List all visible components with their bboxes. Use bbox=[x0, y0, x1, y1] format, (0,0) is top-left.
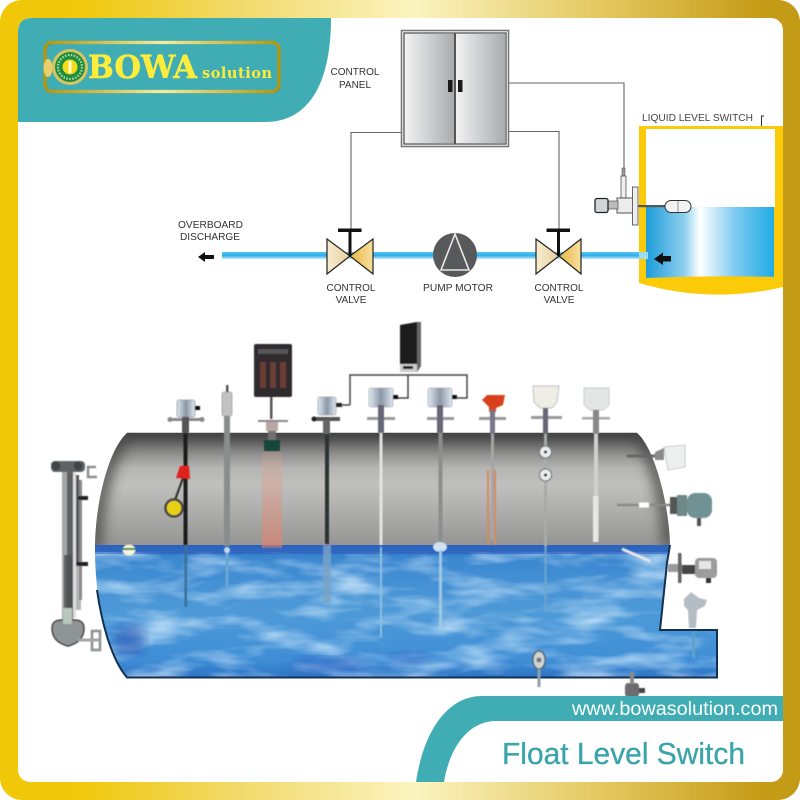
label: left control valve: CONTROL bbox=[327, 283, 376, 294]
logo tagline: solution bbox=[202, 65, 272, 82]
instrument: step-mounted transmitter bbox=[684, 592, 707, 658]
icon: control panel cabinet bbox=[402, 30, 508, 146]
label: control panel: CONTROL bbox=[331, 67, 380, 78]
instrument: float with red clamp bbox=[166, 400, 204, 607]
instrument: small probe bbox=[222, 385, 232, 588]
instrument: probe with head 5 bbox=[367, 388, 398, 637]
instrument: probe with head 6 bbox=[427, 388, 457, 630]
label: overboard discharge bbox=[178, 220, 243, 243]
label: right control valve: CONTROL bbox=[535, 283, 584, 294]
instrument: right upper side switch bbox=[627, 445, 685, 470]
logo wordmark: BOWA bbox=[88, 48, 198, 86]
label: control panel: PANEL bbox=[339, 80, 371, 91]
instrument: bottom drain valve bbox=[625, 672, 645, 697]
panel: small liquid tank bbox=[639, 126, 783, 295]
website url: www.bowasolution.com bbox=[571, 698, 778, 720]
instrument: white head with thick rod bbox=[582, 388, 610, 542]
panel: teal logo corner bbox=[18, 18, 331, 122]
logo emblem bbox=[44, 49, 88, 85]
title: Float Level Switch bbox=[502, 736, 745, 771]
instrument: magnetic side gauge bbox=[51, 461, 100, 650]
pipe: discharge line bbox=[222, 252, 648, 259]
panel: teal website band bbox=[416, 696, 783, 782]
icon: left control valve bbox=[327, 228, 373, 274]
logo: BOWA solution bbox=[44, 42, 280, 92]
label: liquid level switch: LIQUID LEVEL SWITCH bbox=[642, 113, 753, 124]
label: right control valve: VALVE bbox=[544, 295, 575, 306]
label: overboard discharge: DISCHARGE bbox=[180, 232, 240, 243]
instrument: red head probe bbox=[479, 395, 506, 545]
label: left control valve: VALVE bbox=[336, 295, 367, 306]
arrow: overboard discharge bbox=[198, 252, 214, 262]
instrument: right lower side gauge bbox=[622, 549, 717, 583]
instrument: wiring box top bbox=[342, 322, 467, 405]
icon: right control valve bbox=[536, 228, 581, 274]
arrow: tank outflow bbox=[654, 252, 671, 265]
tank shell: gray upper part bbox=[95, 433, 670, 545]
instrument: right middle side gauge bbox=[617, 493, 712, 526]
label: pump motor: PUMP MOTOR bbox=[423, 283, 493, 294]
instrument: probe with head 4 bbox=[312, 397, 342, 603]
pointer: level switch tick bbox=[762, 116, 764, 126]
instrument: small surface float bbox=[122, 544, 136, 556]
tank outline bbox=[97, 545, 717, 678]
instrument: ultrasonic controller and beam bbox=[254, 344, 292, 548]
instrument: white head with two balls bbox=[531, 386, 562, 612]
wiring: control panel to switch and valves bbox=[351, 83, 624, 230]
label: overboard discharge: OVERBOARD bbox=[178, 220, 243, 231]
tank water bbox=[90, 545, 720, 680]
icon: float switch bbox=[595, 168, 691, 225]
panel: large horizontal tank bbox=[90, 433, 720, 680]
instrument: bottom sight gauge bbox=[533, 651, 545, 687]
icon: pump motor bbox=[433, 233, 477, 277]
